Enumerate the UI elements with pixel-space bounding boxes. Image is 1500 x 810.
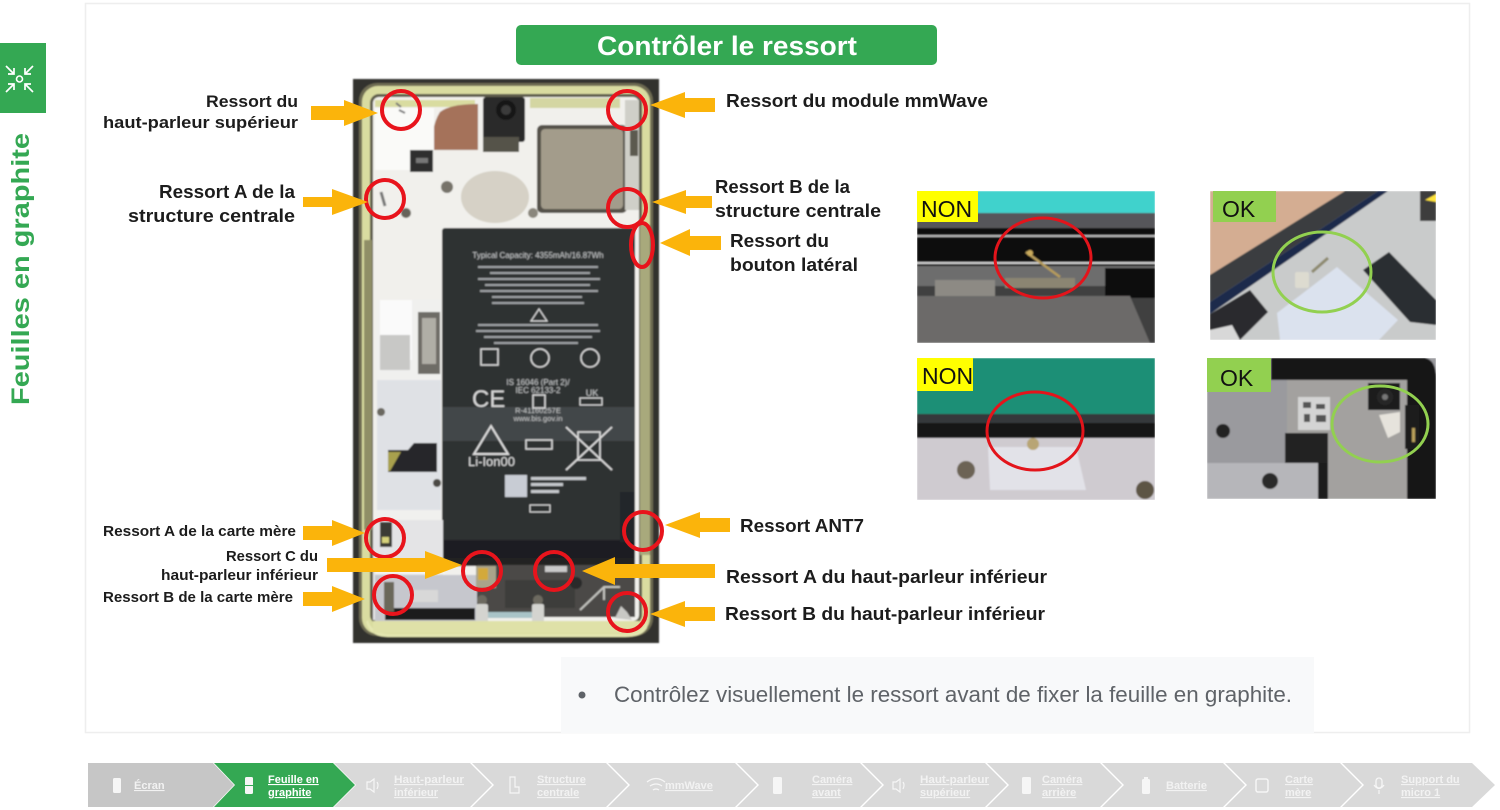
phone photo: IEC 62133-2 [516,386,561,395]
photo: OK example 1: OK [1222,196,1256,222]
nav labels: mmWave [665,780,713,792]
battery [442,228,635,560]
labels: left side: haut-parleur supérieur [103,113,298,132]
title banner [516,25,937,65]
photo: OK example 2: OK [1220,365,1254,391]
photo: OK example 2 [1207,358,1436,499]
nav labels: Support du [1401,774,1460,786]
top left bracket [375,108,434,170]
labels: right side: Ressort A du haut-parleur inférieur [726,567,1047,587]
labels: left side: haut-parleur inférieur [161,567,318,584]
nav labels: Structure [537,774,586,786]
labels: left side: structure centrale [128,206,295,226]
front camera [483,97,525,152]
red markers on phone [366,91,662,631]
sidebar title: Feuilles en graphite [7,133,35,405]
labels: left side: Ressort A de la carte mère [103,523,296,540]
spring A [381,192,385,206]
phone photo: IS 16046 (Part 2)/ [506,378,570,387]
top spring left [396,103,405,113]
labels: left side: Ressort C du [226,548,318,565]
nav labels: centrale [537,787,579,799]
nav labels: Carte [1285,774,1313,786]
labels: right side: Ressort du module mmWave [726,91,988,111]
nav labels: supérieur [920,787,971,799]
sidebar icon [0,43,46,113]
photo: OK example 1 [1210,191,1436,340]
phone photo: Typical Capacity: 4355mAh/16.87Wh [472,251,604,260]
nav labels: micro 1 [1401,787,1440,799]
nav labels: Caméra [812,774,853,786]
nav labels: Haut-parleur [394,774,465,786]
nav labels: avant [812,787,841,799]
title banner: Contrôler le ressort [597,31,857,61]
photo: NON example 2: NON [922,363,973,389]
nav labels: inférieur [394,787,439,799]
nav labels: mère [1285,787,1311,799]
labels: right side: Ressort B de la [715,177,851,197]
labels: right side: Ressort ANT7 [740,516,864,536]
labels: right side: Ressort du [730,231,829,251]
phone photo: Li-Ion00 [468,454,515,469]
nav labels [134,774,1460,799]
flex cable [433,104,478,150]
instruction callout: Contrôlez visuellement le ressort avant de fixer la feuille en graphite. [614,682,1292,707]
phone photo: UK [586,388,598,398]
labels: left side: Ressort B de la carte mère [103,589,293,606]
labels: left side: Ressort A de la [159,182,296,202]
photo: NON example 1 [917,191,1155,343]
nav labels: Écran [134,779,165,792]
nav labels: Haut-parleur [920,774,990,786]
nav labels: graphite [268,787,311,799]
metal shield [537,125,627,213]
labels: left side [103,92,318,606]
labels: right side: Ressort B du haut-parleur inférieur [725,604,1045,624]
nav labels: Batterie [1166,780,1207,792]
labels: right side: bouton latéral [730,255,858,275]
phone photo: www.bis.gov.in [512,414,563,423]
phone photo: CE [472,386,505,413]
photo: NON example 1: NON [921,196,972,222]
navigation breadcrumb [88,763,1495,807]
instruction callout [561,657,1314,733]
photo: NON example 2 [917,358,1155,500]
phone photo [353,79,662,643]
arrows [303,92,730,627]
left speaker panel [377,300,441,520]
labels: right side [715,91,1047,624]
labels: left side: Ressort du [206,92,298,111]
nav icons [113,777,1384,794]
nav labels: Caméra [1042,774,1083,786]
labels: right side: structure centrale [715,201,881,221]
bottom area [373,520,443,620]
nav labels: Feuille en [268,774,319,786]
phone photo: R-41160257E [515,406,561,415]
nav labels: arrière [1042,787,1076,799]
